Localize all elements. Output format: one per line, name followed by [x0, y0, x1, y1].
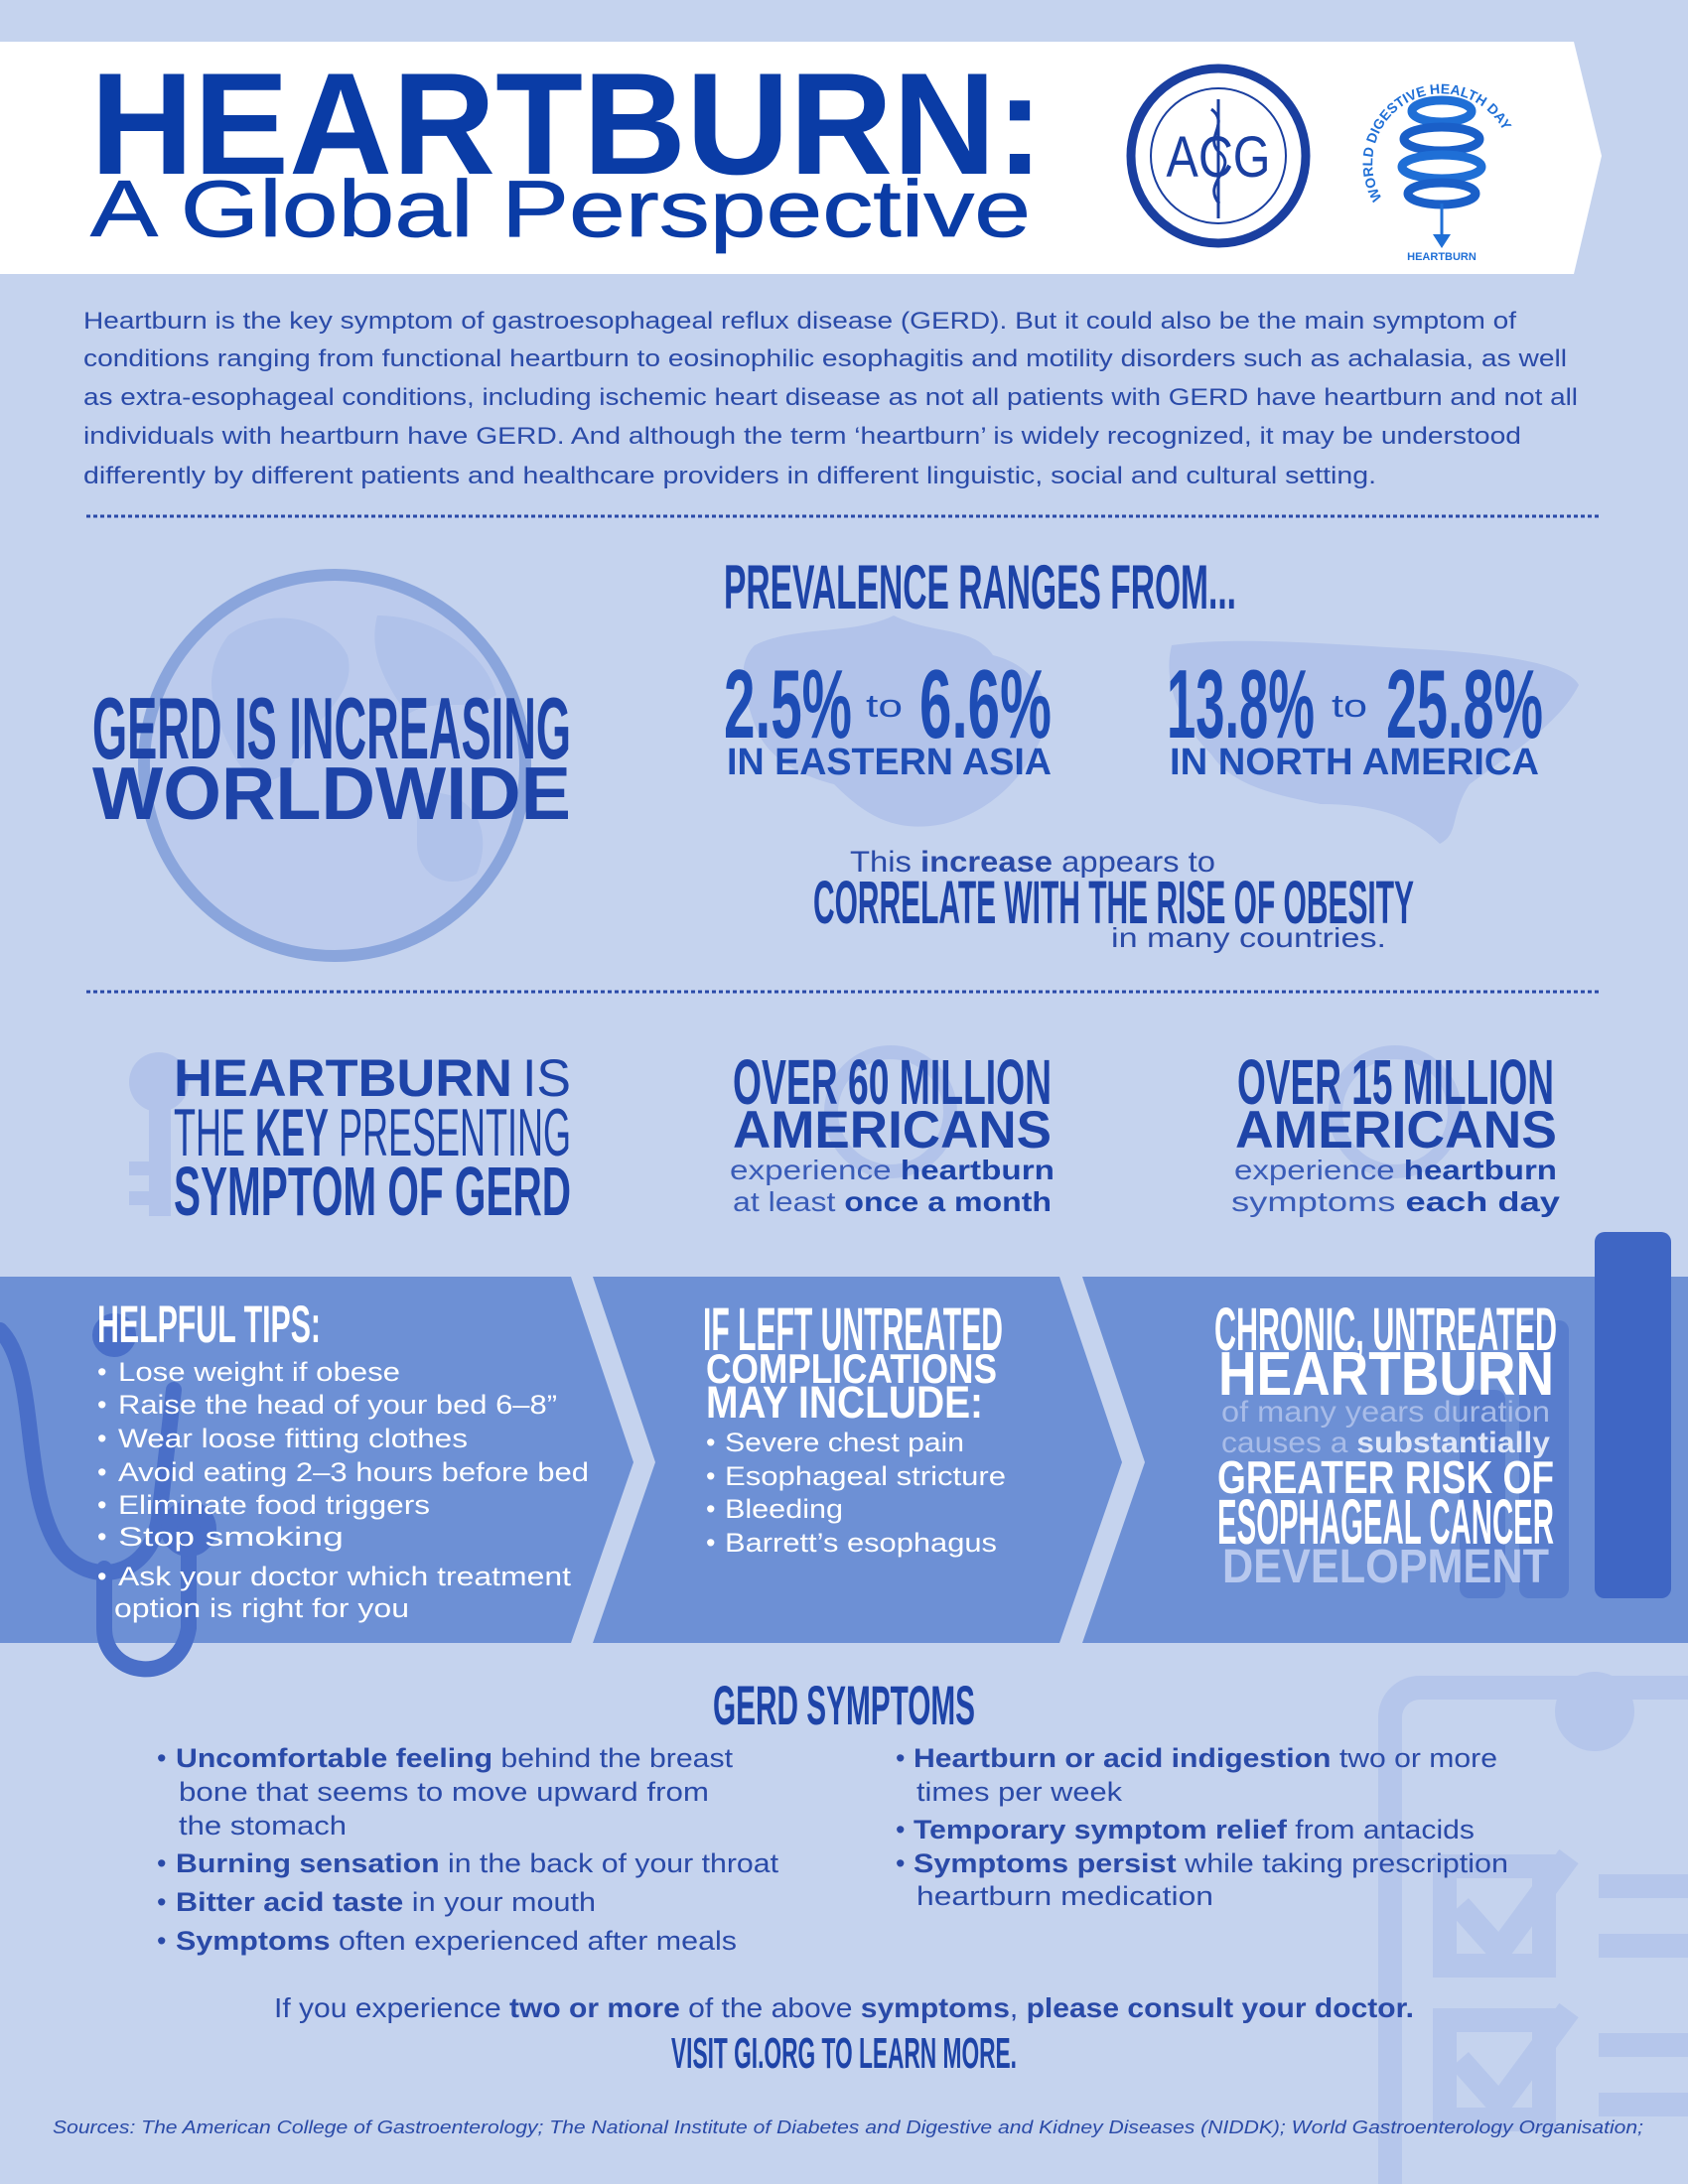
stat: north america: to — [1332, 688, 1367, 724]
list: symptoms left: • — [157, 1887, 166, 1917]
stat: 60 million — [730, 1046, 1055, 1217]
panel: complications — [703, 1296, 1006, 1558]
icon: key — [129, 1052, 189, 1216]
sources: Sources: The American College of Gastroenterology; The National Institute of Diabetes and Digestive and Kidney Diseases (NIDDK); World Gastroenterology Organisation; — [53, 2117, 1643, 2137]
panel: helpful tips: • — [97, 1424, 106, 1453]
panel: helpful tips: • — [97, 1562, 106, 1591]
panel: helpful tips: • — [97, 1357, 106, 1387]
stat: 15 million: AMERICANS — [1235, 1101, 1557, 1160]
text: IF LEFT UNTREATED — [703, 1296, 1003, 1363]
list: symptoms left — [157, 1743, 779, 1956]
list: symptoms left: bone that seems to move upward from — [179, 1777, 709, 1807]
callout: obesity correlation: in many countries. — [1111, 922, 1386, 953]
heading: key presenting symptom: IS — [522, 1049, 571, 1108]
panel: complications: • — [706, 1528, 715, 1558]
panel: helpful tips: • — [97, 1522, 106, 1552]
panel: complications: Barrett’s esophagus — [725, 1528, 997, 1558]
icon: bar chart — [1460, 1232, 1671, 1598]
stat: 15 million — [1231, 1046, 1561, 1217]
logo: World Digestive Health Day: HEARTBURN — [1407, 251, 1477, 263]
intro paragraph: as extra-esophageal conditions, including ischemic heart disease as not all patients with GERD have heartburn and not all — [83, 384, 1578, 411]
stat: 60 million: AMERICANS — [733, 1101, 1052, 1160]
list: symptoms right: times per week — [916, 1777, 1123, 1807]
list: symptoms left: Burning sensation in the back of your throat — [176, 1848, 779, 1878]
panel: helpful tips: option is right for you — [114, 1593, 409, 1623]
stat: eastern asia: 2.5% — [724, 649, 852, 758]
panel: cancer risk: causes a substantially — [1221, 1427, 1550, 1459]
logo: World Digestive Health Day — [1362, 83, 1511, 263]
panel: cancer risk: HEARTBURN — [1218, 1340, 1554, 1409]
intro paragraph: individuals with heartburn have GERD. And although the term ‘heartburn’ is widely recognized, it may be understood — [83, 423, 1521, 450]
panel: complications: Bleeding — [725, 1494, 843, 1524]
heading: GERD is increasing worldwide: WORLDWIDE — [92, 751, 571, 835]
callout: consult doctor — [274, 1992, 1414, 2078]
panel: helpful tips: Raise the head of your bed 6–8” — [118, 1390, 557, 1420]
panel: helpful tips: Avoid eating 2–3 hours before bed — [118, 1457, 589, 1487]
panel: cancer risk: of many years duration — [1221, 1396, 1550, 1429]
intro paragraph: differently by different patients and healthcare providers in different linguistic, social and cultural setting. — [83, 463, 1376, 489]
stat: eastern asia: IN EASTERN ASIA — [727, 742, 1052, 783]
list: symptoms right: • — [896, 1848, 905, 1878]
heading: GERD is increasing worldwide: GERD IS INCREASING — [92, 679, 571, 777]
header band — [0, 42, 1602, 274]
callout: obesity correlation — [813, 846, 1414, 953]
callout: consult doctor: VISIT GI.ORG TO LEARN MORE. — [671, 2029, 1017, 2078]
intro paragraph: conditions ranging from functional heartburn to eosinophilic esophagitis and motility disorders such as achalasia, as well — [83, 345, 1567, 372]
intro paragraph: Heartburn is the key symptom of gastroesophageal reflux disease (GERD). But it could also be the main symptom of — [83, 308, 1516, 335]
heading: key presenting symptom — [174, 1049, 571, 1230]
panel: complications: Esophageal stricture — [725, 1461, 1006, 1491]
list: symptoms left: • — [157, 1743, 166, 1773]
heading: GERD is increasing worldwide — [92, 679, 571, 835]
panel: cancer risk — [1214, 1296, 1557, 1593]
panel: complications: MAY INCLUDE: — [706, 1377, 983, 1428]
list: symptoms right: heartburn medication — [916, 1881, 1213, 1911]
logo: World Digestive Health Day: WORLD DIGESTIVE HEALTH DAY — [1362, 83, 1511, 203]
stat: 15 million: experience heartburn — [1234, 1155, 1557, 1185]
panel: complications: • — [706, 1494, 715, 1524]
panel: helpful tips: Lose weight if obese — [118, 1357, 400, 1387]
stat: 60 million: OVER 60 MILLION — [733, 1046, 1052, 1118]
list: symptoms left: the stomach — [179, 1811, 347, 1841]
stat: 15 million: symptoms each day — [1231, 1186, 1561, 1217]
list: symptoms left: Bitter acid taste in your mouth — [176, 1887, 596, 1917]
title: HEARTBURN: — [90, 43, 1044, 205]
panel: helpful tips: • — [97, 1490, 106, 1520]
logo: ACG — [1131, 68, 1306, 243]
list: symptoms right: • — [896, 1743, 905, 1773]
stat: north america — [1167, 649, 1543, 783]
icon: globe — [144, 575, 525, 956]
stat: eastern asia: 6.6% — [919, 649, 1052, 758]
panel: complications: COMPLICATIONS — [706, 1345, 997, 1392]
heading: prevalence: PREVALENCE RANGES FROM... — [724, 553, 1236, 622]
list: symptoms right: Symptoms persist while taking prescription — [914, 1848, 1508, 1878]
panel: complications: Severe chest pain — [725, 1428, 964, 1457]
list: symptoms left: • — [157, 1926, 166, 1956]
panel: helpful tips: Stop smoking — [118, 1522, 344, 1552]
panel: helpful tips: Wear loose fitting clothes — [118, 1424, 468, 1453]
panel: complications: • — [706, 1428, 715, 1457]
intro paragraph — [83, 308, 1578, 489]
stat: 60 million: at least once a month — [733, 1186, 1052, 1217]
icon: stethoscope — [0, 1321, 209, 1669]
panel: cancer risk: DEVELOPMENT — [1222, 1541, 1549, 1593]
list: symptoms right: Temporary symptom relief from antacids — [914, 1815, 1475, 1844]
heading: GERD symptoms: GERD SYMPTOMS — [713, 1674, 975, 1736]
callout: obesity correlation: This increase appears to — [850, 846, 1215, 879]
heading: key presenting symptom: HEARTBURN — [174, 1049, 512, 1108]
stat: north america: IN NORTH AMERICA — [1170, 742, 1539, 783]
list: symptoms right — [896, 1743, 1508, 1911]
band: chevron panels — [0, 1277, 1688, 1643]
heading: key presenting symptom: SYMPTOM OF GERD — [174, 1153, 571, 1230]
list: symptoms left: • — [157, 1848, 166, 1878]
logo: ACG: ACG — [1166, 125, 1271, 190]
stat: north america: 25.8% — [1386, 649, 1543, 758]
list: symptoms left: Symptoms often experienced after meals — [176, 1926, 737, 1956]
panel: helpful tips: Ask your doctor which treatment — [118, 1562, 572, 1591]
panel: helpful tips: Eliminate food triggers — [118, 1490, 430, 1520]
panel: cancer risk: GREATER RISK OF — [1217, 1451, 1554, 1503]
stat: north america: 13.8% — [1167, 649, 1315, 758]
list: symptoms left: Uncomfortable feeling behind the breast — [176, 1743, 734, 1773]
panel: complications: • — [706, 1461, 715, 1491]
icon: faint dials — [831, 1052, 1455, 1171]
heading: key presenting symptom: THE KEY PRESENTING — [174, 1095, 571, 1170]
callout: consult doctor: If you experience two or more of the above symptoms , please consult your doctor. — [274, 1992, 1414, 2023]
stat: eastern asia: to — [866, 688, 903, 724]
stat: 60 million: experience heartburn — [730, 1155, 1055, 1185]
list: symptoms right: • — [896, 1815, 905, 1844]
title: A Global Perspective — [90, 165, 1031, 254]
icon: map silhouettes — [743, 615, 1579, 844]
stat: eastern asia — [724, 649, 1052, 783]
panel: helpful tips: HELPFUL TIPS: — [97, 1296, 321, 1354]
icon: clipboard — [1390, 1684, 1688, 2184]
panel: helpful tips: • — [97, 1390, 106, 1420]
panel: helpful tips — [97, 1296, 589, 1623]
panel: helpful tips: • — [97, 1457, 106, 1487]
list: symptoms right: Heartburn or acid indigestion two or more — [914, 1743, 1497, 1773]
